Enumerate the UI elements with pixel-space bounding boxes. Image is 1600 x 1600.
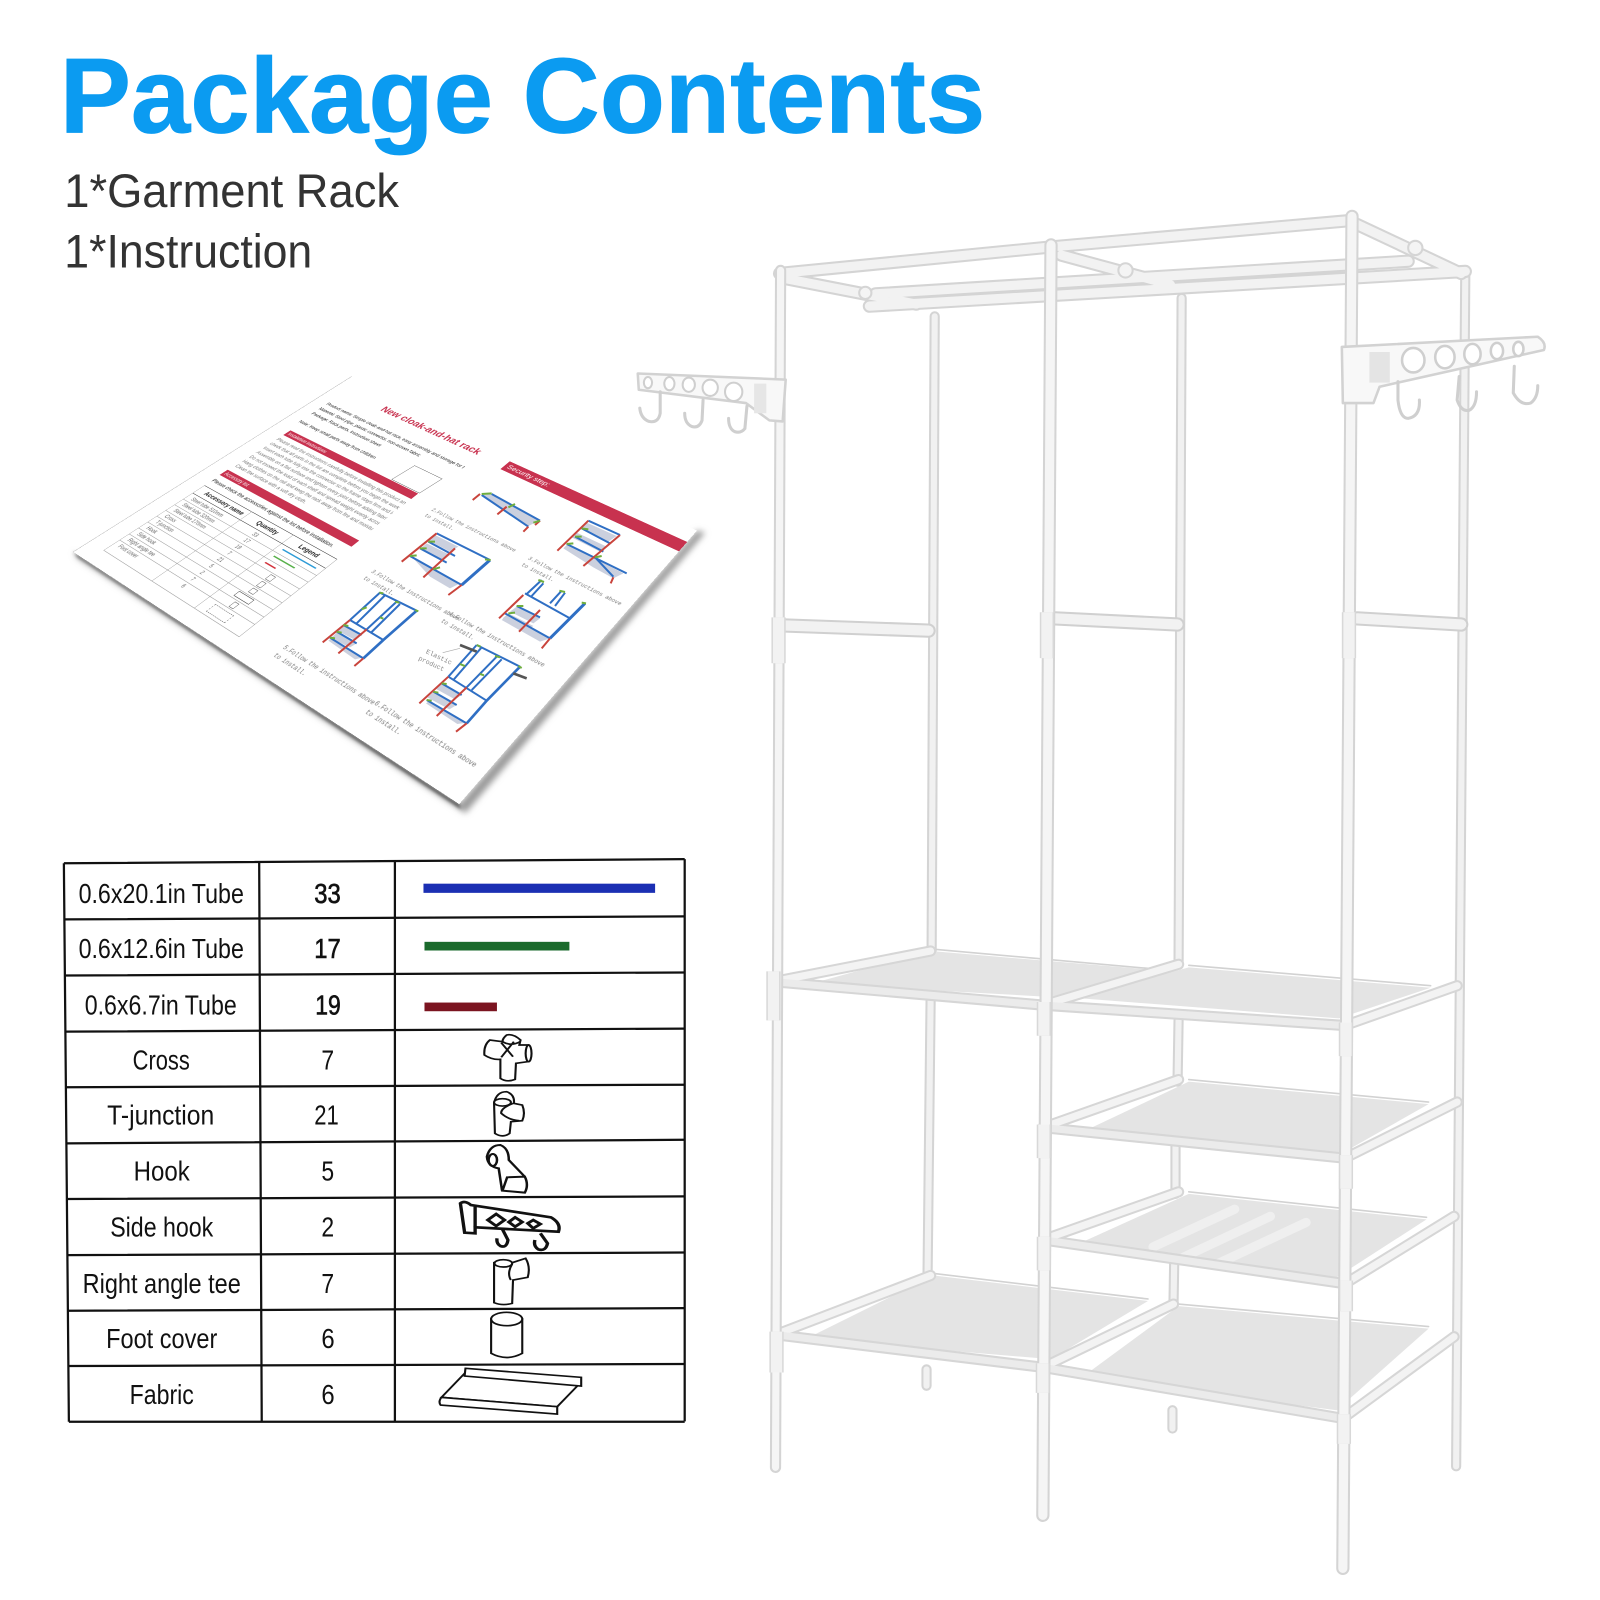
garment rack (638, 216, 1545, 1568)
pink band: accessories: Accessory list (223, 471, 251, 487)
row: hook: 5 (321, 1156, 334, 1187)
accessory table: Side hook (135, 531, 158, 546)
row: side hook: Side hook (110, 1212, 213, 1243)
sheet title: New cloak-and-hat rack (378, 405, 484, 456)
row: fabric: 6 (321, 1379, 335, 1410)
assembly captions: 6.Follow the instructions above (372, 700, 479, 769)
sheet intro text: Material: Steel pipe, plastic connector, non-woven fabric (317, 407, 422, 457)
assembly captions: 3.Follow the instructions above (526, 556, 623, 607)
parts table (64, 859, 685, 1422)
row: foot cover: 6 (321, 1323, 335, 1354)
pink band: security step: Security step: (505, 464, 552, 488)
pink band: instructions: Installation instructions (286, 432, 328, 454)
diagram step 4 (499, 580, 586, 648)
accessory note: Please check the accessories against the list before installation. (210, 478, 337, 548)
accessory table: 7 (189, 576, 197, 582)
row: 0.6x20.1in tube: 0.6x20.1in Tube (79, 878, 244, 909)
assembly captions: to install. (271, 652, 309, 677)
assembly captions: to install. (519, 562, 556, 583)
diagram label: elastic product: product (417, 654, 446, 673)
diagram step 3 (402, 533, 491, 595)
instruction paragraph: Clean the surface with a soft dry cloth. (233, 463, 309, 505)
accessory table: Legend (296, 543, 322, 559)
accessory table: Steel tube 510mm (189, 497, 226, 518)
accessory table: T-junction (154, 519, 176, 533)
assembly captions: to install. (363, 709, 404, 737)
row: t-junction: T-junction (107, 1099, 214, 1130)
rack: front posts (773, 216, 1352, 1568)
pink band: instructions (283, 430, 418, 499)
rack: right side hook bracket (1342, 337, 1545, 418)
instruction sheet (73, 377, 697, 804)
row: side hook (110, 1202, 559, 1250)
row: 0.6x6.7in tube (85, 989, 497, 1020)
subtitle: garment rack: 1*Garment Rack (64, 165, 399, 217)
accessory table: 21 (215, 556, 226, 563)
row: hook: Hook (134, 1156, 190, 1187)
rack: left side hook bracket (638, 373, 786, 432)
accessory table: 17 (242, 537, 252, 544)
instruction paragraph: check that all parts in the list are complete before you begin the work. (268, 441, 402, 510)
row: fabric: Fabric (130, 1379, 194, 1410)
row: 0.6x20.1in tube (79, 878, 655, 909)
assembly captions: to install. (423, 513, 456, 532)
diagram step 5 (323, 593, 418, 666)
row: 0.6x20.1in tube: 33 (314, 878, 341, 909)
row: 0.6x6.7in tube: 19 (315, 989, 341, 1020)
row: right angle tee (83, 1258, 529, 1305)
diagram step 2 (557, 521, 627, 583)
row: 0.6x12.6in tube: 17 (314, 933, 341, 964)
row: 0.6x12.6in tube (79, 933, 569, 964)
accessory table: 33 (250, 531, 261, 538)
diagram label: elastic product: Elastic (425, 648, 453, 667)
diagram step 1 (473, 493, 540, 532)
accessory table: Steel tube 170mm (172, 508, 208, 530)
accessory table: 5 (207, 563, 216, 569)
subtitle: instruction: 1*Instruction (64, 225, 312, 277)
row: t-junction (107, 1092, 524, 1136)
small warning diagram (391, 465, 442, 493)
assembly captions: 4.Follow the instructions above (446, 611, 547, 669)
row: cross (133, 1035, 532, 1081)
title: Package Contents (60, 36, 985, 156)
instruction paragraph (233, 437, 408, 531)
row: t-junction: 21 (314, 1099, 339, 1130)
row: side hook: 2 (321, 1212, 334, 1243)
row: right angle tee: Right angle tee (83, 1268, 241, 1299)
accessory table: 2 (198, 570, 207, 576)
assembly captions: 2.Follow the instructions above (430, 507, 517, 553)
row: right angle tee: 7 (321, 1268, 334, 1299)
assembly captions (271, 507, 623, 769)
row: foot cover (106, 1312, 522, 1358)
pink band: security step (500, 461, 687, 551)
row: cross: 7 (321, 1044, 334, 1075)
row: foot cover: Foot cover (106, 1323, 217, 1354)
accessory table: Cross (163, 514, 179, 523)
assembly captions: to install. (439, 618, 477, 642)
accessory table: Foot cover (116, 543, 141, 559)
accessory table: 6 (179, 583, 188, 589)
assembly captions: 5.Follow the instructions above (281, 644, 377, 707)
assembly captions: to install. (361, 576, 397, 597)
rack: middle cross rails (786, 618, 1461, 631)
rack: rear posts (927, 270, 1465, 1466)
accessory table: 7 (225, 550, 234, 556)
sheet intro text: Package: Rack parts, instruction sheet (310, 411, 383, 447)
accessory table (104, 485, 338, 637)
pink band: accessories (220, 470, 359, 547)
accessory table: Right angle tee (126, 537, 158, 558)
sheet intro text: Note: Keep small parts away from children (297, 419, 378, 460)
rack: top frame rails (780, 220, 1465, 306)
row: 0.6x12.6in tube: 0.6x12.6in Tube (79, 933, 244, 964)
table grid (64, 859, 685, 1422)
accessory table: 19 (233, 544, 244, 550)
row: cross: Cross (133, 1044, 190, 1075)
rack: fabric shelves (806, 949, 1431, 1410)
diagram step 6 (419, 645, 527, 732)
row: fabric (130, 1368, 581, 1414)
accessory table: Steel tube 320mm (180, 502, 217, 524)
accessory table: Hook (144, 525, 160, 535)
rack: shelf rails (773, 951, 1457, 1418)
row: hook (134, 1145, 527, 1193)
row: 0.6x6.7in tube: 0.6x6.7in Tube (85, 989, 237, 1020)
instruction sheet shadow (73, 377, 705, 813)
assembly captions: 3.Follow the instructions above (369, 569, 461, 622)
accessory table: Accessory name (202, 491, 246, 517)
accessory table: Quantity (254, 520, 281, 536)
